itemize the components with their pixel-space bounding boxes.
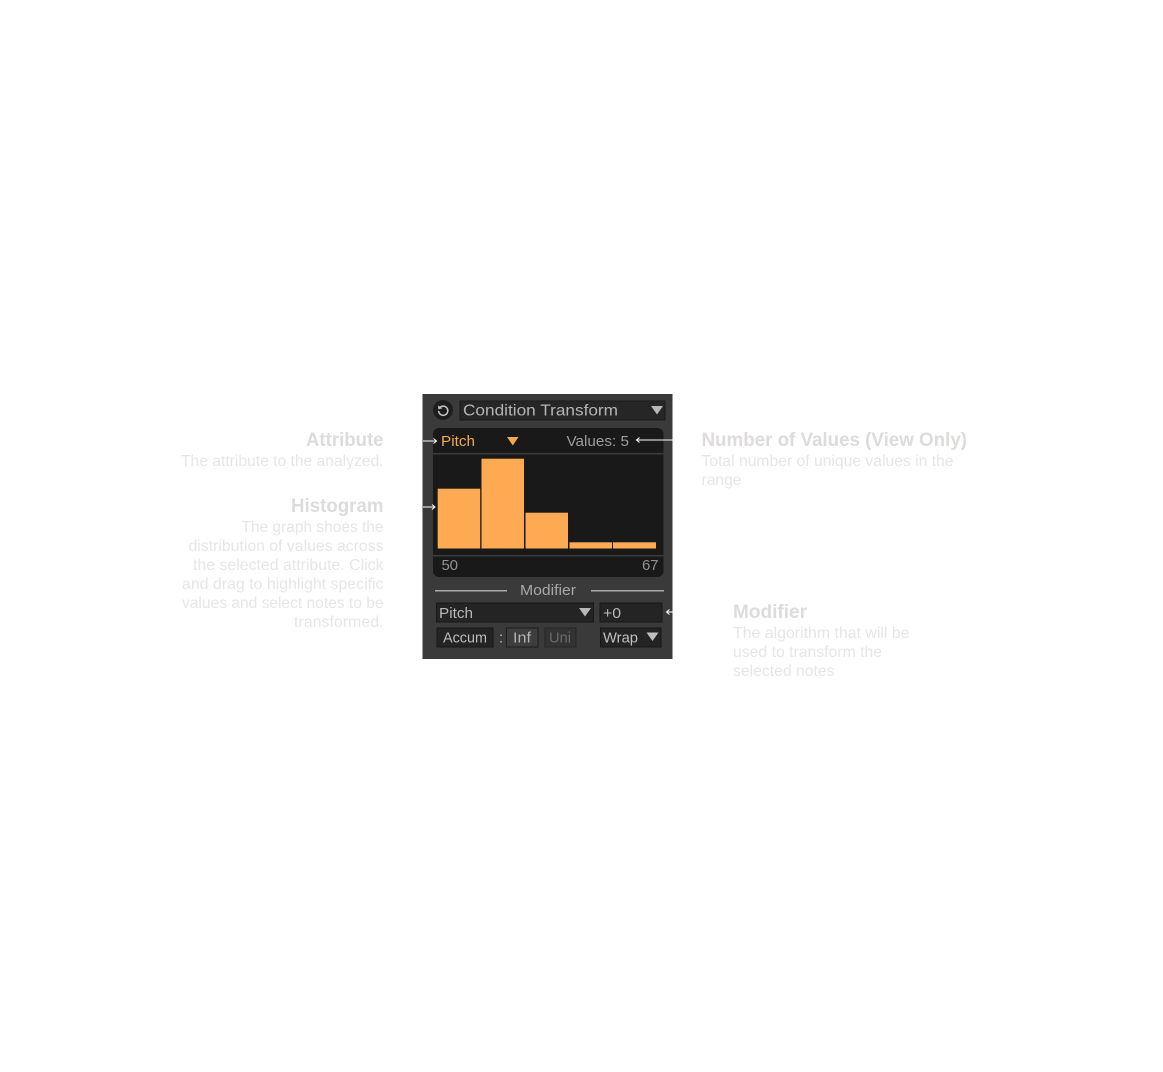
histogram range labels: 50 [442,557,458,574]
arrow: number of values [636,438,673,442]
preset dropdown: Condition Transform [463,402,618,420]
device panel [422,394,672,659]
attribute selector: Pitch [441,433,475,450]
callout: histogram: transformed. [294,614,384,631]
callout: modifier [733,602,910,680]
callout: histogram: the selected attribute. Click [193,557,384,574]
callout: modifier: Modifier [733,602,808,623]
colon separator: : [499,630,503,646]
wrap dropdown [600,628,661,647]
histogram range labels: 67 [642,557,658,574]
arrow: modifier [666,610,673,614]
modifier section [435,582,664,647]
callout: attribute [181,430,384,470]
callout: modifier: used to transform the [733,644,882,661]
histogram panel [433,428,664,577]
arrow: histogram [423,504,435,510]
callout: attribute: The attribute to the analyzed. [181,453,384,470]
modifier value field: +0 [603,605,621,622]
callout: histogram: distribution of values across [188,538,384,555]
callout: number of values [702,430,967,489]
callout: number of values: Number of Values (View Only) [702,430,967,451]
values readout: Values: 5 [566,433,629,450]
attribute selector [441,433,518,450]
inf button: Inf [513,630,532,646]
callout: attribute: Attribute [306,430,384,451]
callout: histogram: Histogram [291,496,384,517]
modifier value field [600,603,662,622]
modifier algorithm dropdown: Pitch [439,605,473,622]
histogram range labels [442,557,658,574]
wrap dropdown: Wrap [603,630,638,646]
modifier algorithm dropdown [436,603,594,622]
modifier heading: Modifier [520,582,576,599]
histogram bars [438,459,656,548]
callout: histogram: values and select notes to be [182,595,384,612]
callout: histogram: The graph shoes the [242,519,384,536]
arrow: attribute [423,438,436,444]
callout: histogram [182,496,384,631]
accum button: Accum [443,630,487,646]
callout: modifier: The algorithm that will be [733,625,910,642]
icon: reset button [433,400,453,420]
callout: number of values: range [702,472,742,489]
preset dropdown [460,401,665,420]
inf button [506,628,538,647]
callout: number of values: Total number of unique values in the [702,453,954,470]
uni button [545,628,576,647]
callout: modifier: selected notes [733,663,834,680]
uni button: Uni [549,630,571,646]
callout: histogram: and drag to highlight specific [182,576,384,593]
